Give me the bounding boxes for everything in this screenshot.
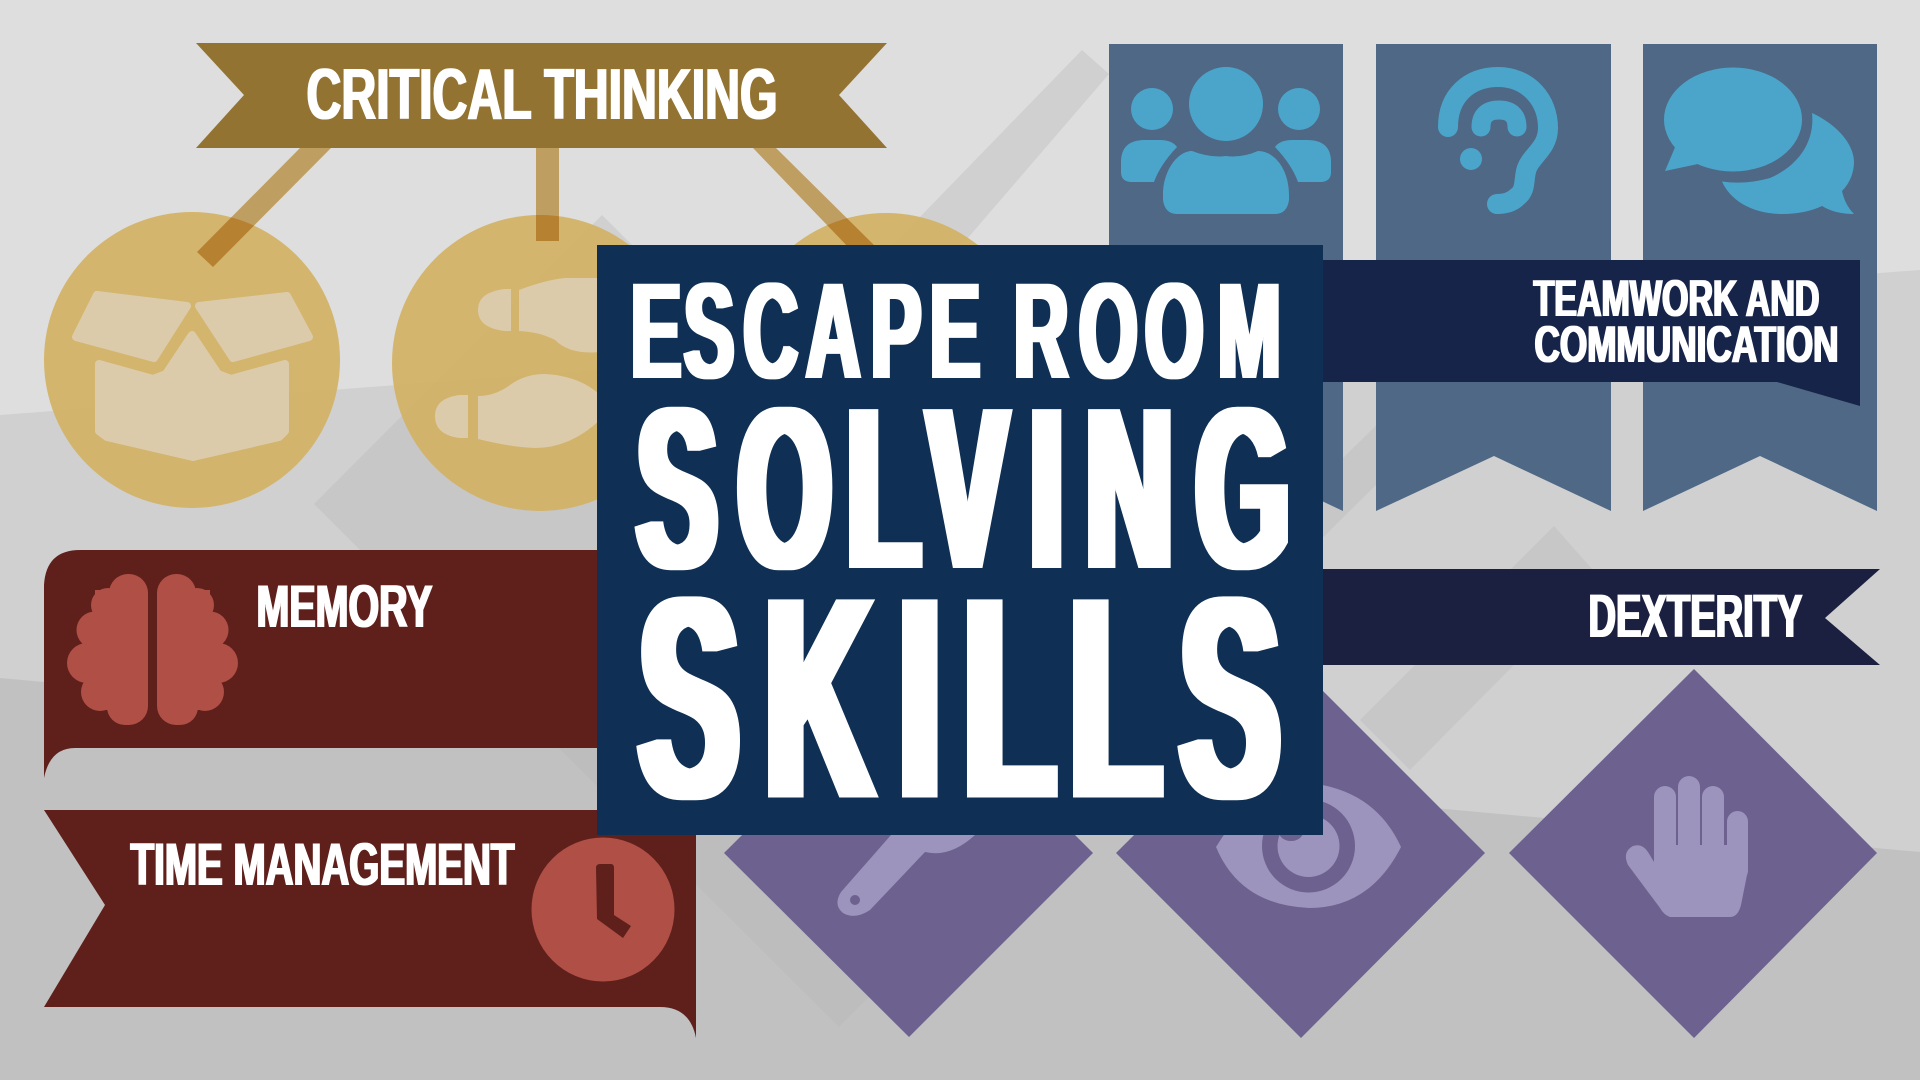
ribbon: speech bubbles <box>1643 44 1877 511</box>
banner: teamwork and communication <box>1320 260 1860 406</box>
ribbon: ear <box>1376 44 1611 511</box>
panel: time management <box>44 810 696 1038</box>
diamond: wrench <box>724 669 1093 1037</box>
diamond: hand <box>1509 669 1877 1038</box>
panel: critical thinking <box>44 43 1034 511</box>
label: time management: TIME MANAGEMENT <box>130 831 514 898</box>
title panel <box>597 245 1323 859</box>
icon: clock <box>532 838 674 982</box>
icon: gold circle with box <box>44 212 340 508</box>
title: escape room: ESCAPE ROOM <box>631 255 1281 408</box>
panel: dexterity <box>724 569 1880 1038</box>
panel: memory <box>44 550 600 778</box>
panel: teamwork and communication <box>1109 44 1877 511</box>
ribbon: memory <box>44 550 600 778</box>
connector: left <box>197 148 331 267</box>
banner: critical thinking: CRITICAL THINKING <box>306 55 778 135</box>
label: memory: MEMORY <box>256 573 432 640</box>
connector: center <box>536 148 559 241</box>
icon: gold circle with footprints <box>392 215 688 511</box>
ribbon: people <box>1109 44 1343 511</box>
diamond: eye <box>1116 669 1485 1038</box>
connector: right <box>753 148 879 250</box>
icon: brain <box>67 574 238 725</box>
banner: critical thinking <box>196 43 887 148</box>
ribbon: time management <box>44 810 696 1038</box>
banner: dexterity <box>1320 569 1880 665</box>
title: solving: SOLVING <box>637 360 1289 618</box>
icon: gold circle, third <box>738 213 1034 509</box>
title: skills: SKILLS <box>639 537 1280 859</box>
